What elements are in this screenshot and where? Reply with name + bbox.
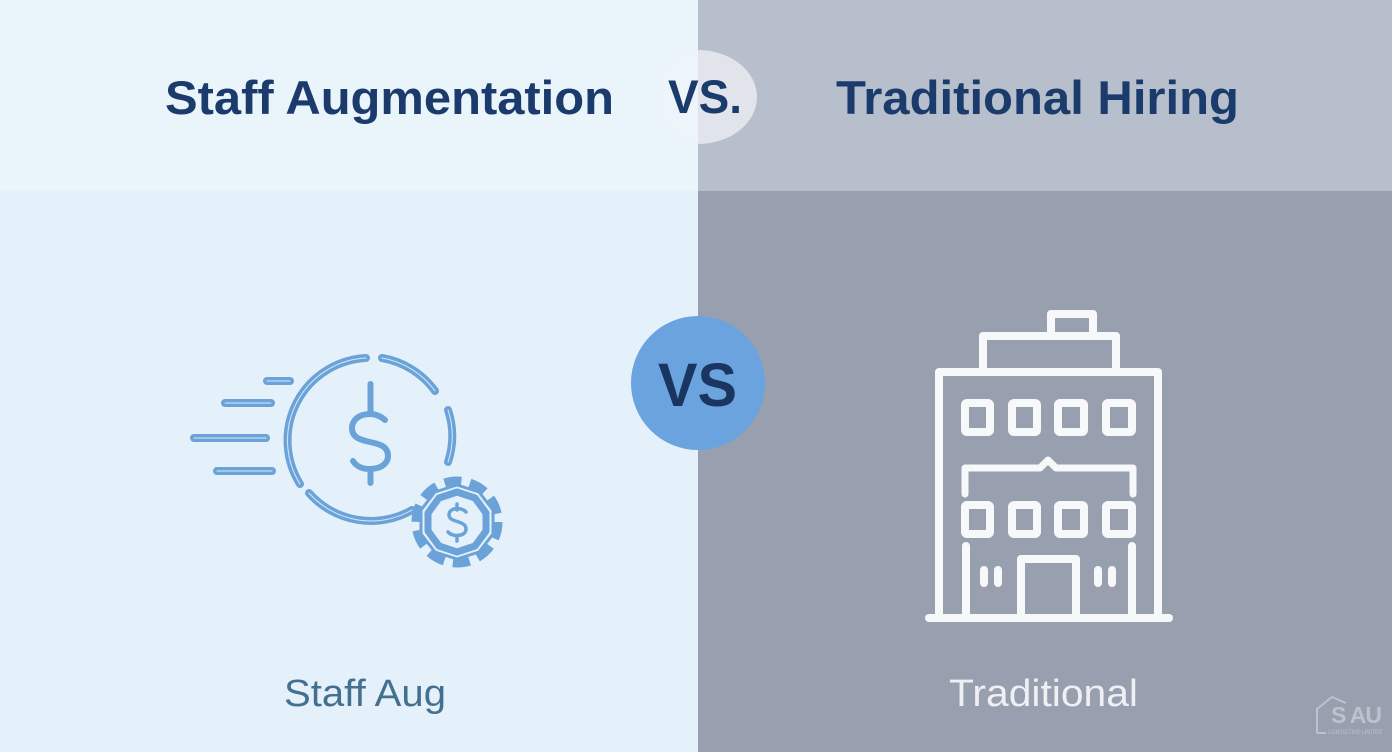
panel: staff augmentation body bbox=[0, 191, 698, 752]
heading: staff augmentation: Staff Augmentation bbox=[165, 71, 614, 124]
heading: vs.: VS. bbox=[668, 70, 742, 123]
small wall details bbox=[984, 570, 1112, 583]
cornice bbox=[965, 460, 1133, 494]
base line bbox=[929, 614, 1169, 622]
ring highlights bbox=[194, 358, 452, 521]
watermark logo: CONSULTING LIMITED bbox=[1328, 730, 1383, 736]
upper windows bbox=[965, 403, 1132, 432]
header vs badge bbox=[657, 50, 757, 144]
label: staff aug: Staff Aug bbox=[284, 673, 446, 715]
heading: traditional hiring: Traditional Hiring bbox=[836, 71, 1239, 124]
pillars and door bbox=[966, 546, 1132, 618]
icon: office building bbox=[929, 314, 1169, 618]
center vs badge: VS bbox=[658, 351, 737, 419]
panel: traditional hiring body bbox=[698, 191, 1392, 752]
lower windows bbox=[965, 505, 1132, 534]
icon: gear bbox=[416, 481, 498, 563]
watermark logo: S AU bbox=[1331, 702, 1382, 728]
icon: fast money with gear bbox=[194, 358, 498, 563]
watermark logo bbox=[1317, 697, 1383, 736]
icon: dollar sign bbox=[352, 384, 388, 483]
panel: staff augmentation header bbox=[0, 0, 698, 191]
panel: traditional hiring header bbox=[698, 0, 1392, 191]
label: traditional: Traditional bbox=[949, 673, 1138, 715]
coin ring and speed lines bbox=[194, 358, 452, 521]
center vs badge bbox=[631, 316, 765, 450]
